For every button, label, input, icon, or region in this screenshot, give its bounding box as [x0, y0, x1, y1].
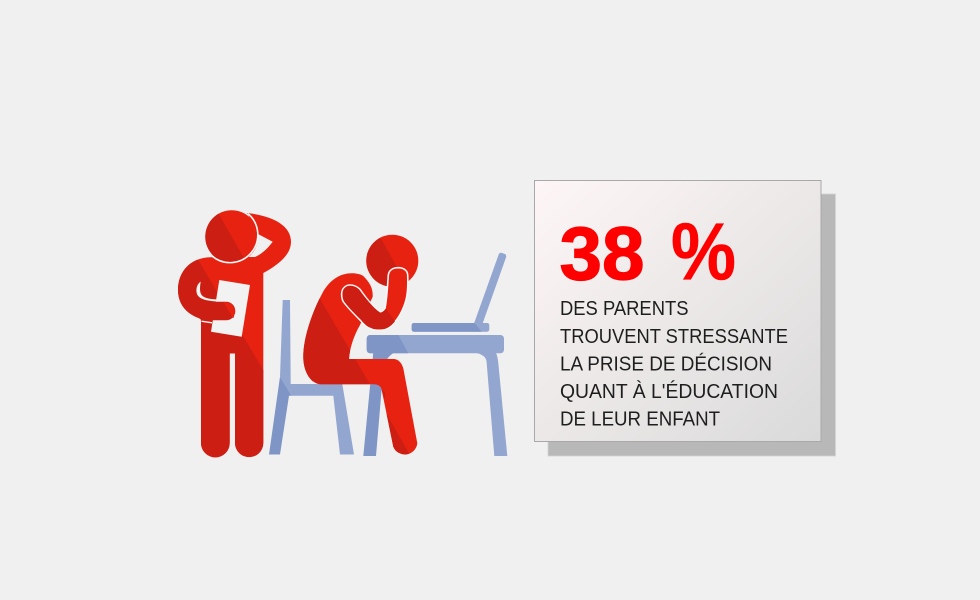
laptop	[412, 253, 506, 332]
crescent gap by the arm	[196, 282, 217, 302]
statistic card	[534, 180, 836, 456]
headline number	[560, 207, 736, 297]
desk left leg	[363, 352, 395, 456]
description text: DE LEUR ENFANT	[560, 408, 720, 430]
laptop base shaded	[412, 323, 482, 332]
desk right leg	[477, 353, 507, 456]
headline number: 38	[560, 211, 644, 295]
laptop base	[412, 323, 489, 332]
description text: DES PARENTS	[560, 297, 688, 320]
description text: TROUVENT STRESSANTE	[560, 325, 788, 348]
chair rear leg	[269, 377, 292, 454]
headline number: %	[671, 207, 736, 297]
seated parent body and leg	[303, 273, 417, 454]
figure: standing parent	[178, 210, 291, 457]
standing parent body	[178, 213, 291, 457]
desk top	[367, 335, 504, 353]
desk top shaded end	[367, 335, 408, 353]
seated parent arm holding head	[342, 268, 408, 330]
sheet of paper	[211, 280, 250, 337]
card panel	[534, 180, 821, 442]
forearm over the paper	[205, 302, 235, 318]
desk	[363, 335, 507, 456]
chair	[269, 300, 354, 454]
chair back and seat	[280, 300, 354, 454]
infographic canvas	[178, 180, 836, 458]
card drop shadow	[548, 194, 836, 456]
laptop screen	[474, 253, 506, 324]
description text	[560, 297, 788, 430]
seated parent head	[366, 235, 418, 287]
description text: LA PRISE DE DÉCISION	[560, 352, 772, 376]
description text: QUANT À L'ÉDUCATION	[560, 380, 778, 403]
head of standing parent	[205, 210, 258, 263]
gap under the forearm	[202, 321, 212, 323]
figure: seated parent	[303, 235, 418, 454]
